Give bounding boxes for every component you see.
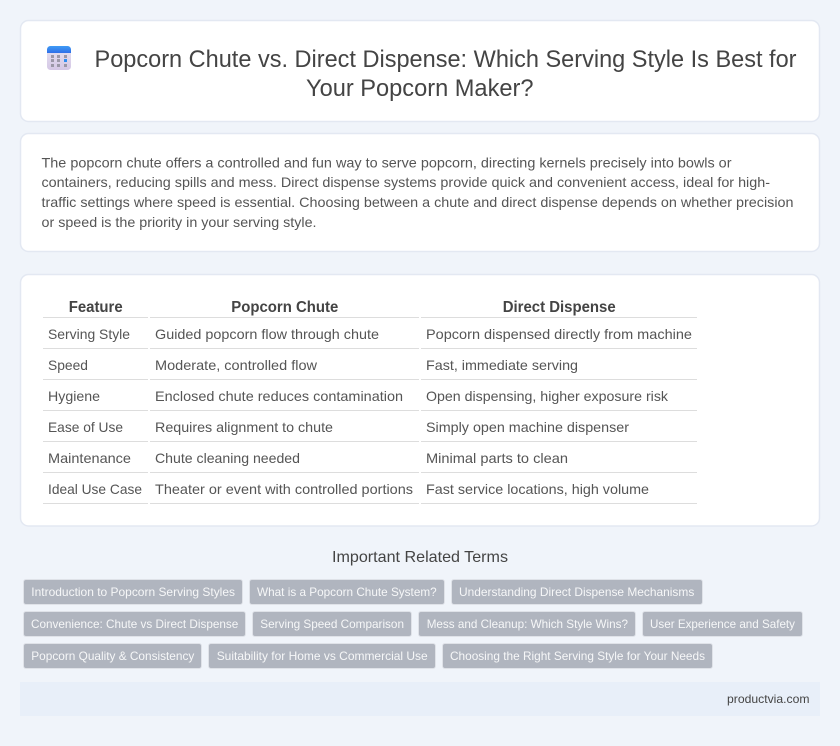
row: ideal use case: Theater or event with controlled portions (155, 481, 413, 497)
row: serving style: Guided popcorn flow through chute (155, 326, 379, 342)
tag: What is a Popcorn Chute System? (257, 585, 437, 599)
tag: Choosing the Right Serving Style for Your Needs (450, 649, 705, 663)
row: serving style (48, 326, 692, 342)
panel: comparison table (20, 274, 820, 526)
tag (418, 612, 636, 636)
intro paragraph (42, 154, 794, 230)
row: hygiene: Hygiene (48, 388, 100, 404)
footer: productvia.com (727, 692, 810, 706)
intro paragraph: or speed is the priority in your serving style. (42, 214, 316, 230)
tag (208, 644, 436, 668)
tag: Popcorn Quality & Consistency (31, 649, 194, 663)
row: maintenance: Maintenance (48, 450, 131, 466)
intro paragraph: The popcorn chute offers a controlled and fun way to serve popcorn, directing kernels precisely into bowls or (42, 154, 732, 170)
tag (250, 580, 444, 604)
title text (94, 46, 796, 102)
icon: calendar (47, 46, 71, 70)
row: hygiene: Enclosed chute reduces contamination (155, 388, 403, 404)
footer (20, 682, 820, 716)
intro paragraph: traffic settings where speed is essential. Choosing between a chute and direct dispense depends on whether precision (42, 194, 794, 210)
row: speed: Speed (48, 357, 88, 373)
tag (442, 644, 712, 668)
row: ideal use case: Ideal Use Case (48, 481, 142, 497)
tag: Suitability for Home vs Commercial Use (217, 649, 428, 663)
tag (24, 580, 242, 604)
row: serving style: Popcorn dispensed directly from machine (426, 326, 692, 342)
tag: Understanding Direct Dispense Mechanisms (459, 585, 694, 599)
tag (252, 612, 412, 636)
row: hygiene: Open dispensing, higher exposure risk (426, 388, 669, 404)
tag: Mess and Cleanup: Which Style Wins? (427, 617, 628, 631)
row: speed (48, 357, 578, 373)
table header (69, 299, 616, 316)
tag (24, 612, 246, 636)
row: maintenance (48, 450, 568, 466)
tag: Introduction to Popcorn Serving Styles (31, 585, 235, 599)
row: speed: Fast, immediate serving (426, 357, 578, 373)
row: ideal use case: Fast service locations, high volume (426, 481, 649, 497)
table header: Feature (69, 299, 123, 316)
tag (642, 612, 802, 636)
tag: Serving Speed Comparison (260, 617, 404, 631)
table header: Direct Dispense (503, 299, 616, 316)
tag: Convenience: Chute vs Direct Dispense (31, 617, 239, 631)
row: maintenance: Chute cleaning needed (155, 450, 300, 466)
row: ease of use: Ease of Use (48, 419, 123, 435)
title text: Your Popcorn Maker? (306, 75, 534, 102)
tag (24, 644, 202, 668)
intro paragraph: containers, reducing spills and mess. Direct dispense systems provide quick and convenient access, ideal for high- (42, 174, 770, 190)
heading: related terms: Important Related Terms (332, 549, 508, 566)
panel: introduction (20, 134, 820, 252)
row: ease of use: Simply open machine dispenser (426, 419, 629, 435)
table header: Popcorn Chute (231, 299, 338, 316)
row: ease of use (48, 419, 629, 435)
row: ideal use case (48, 481, 649, 497)
row: ease of use: Requires alignment to chute (155, 419, 333, 435)
row: maintenance: Minimal parts to clean (426, 450, 568, 466)
panel: title (20, 20, 820, 122)
tag (452, 580, 702, 604)
tag: User Experience and Safety (650, 617, 795, 631)
row: serving style: Serving Style (48, 326, 130, 342)
title text: Popcorn Chute vs. Direct Dispense: Which Serving Style Is Best for (94, 46, 796, 73)
row: speed: Moderate, controlled flow (155, 357, 318, 373)
related term tags (24, 580, 802, 668)
row: hygiene (48, 388, 669, 404)
